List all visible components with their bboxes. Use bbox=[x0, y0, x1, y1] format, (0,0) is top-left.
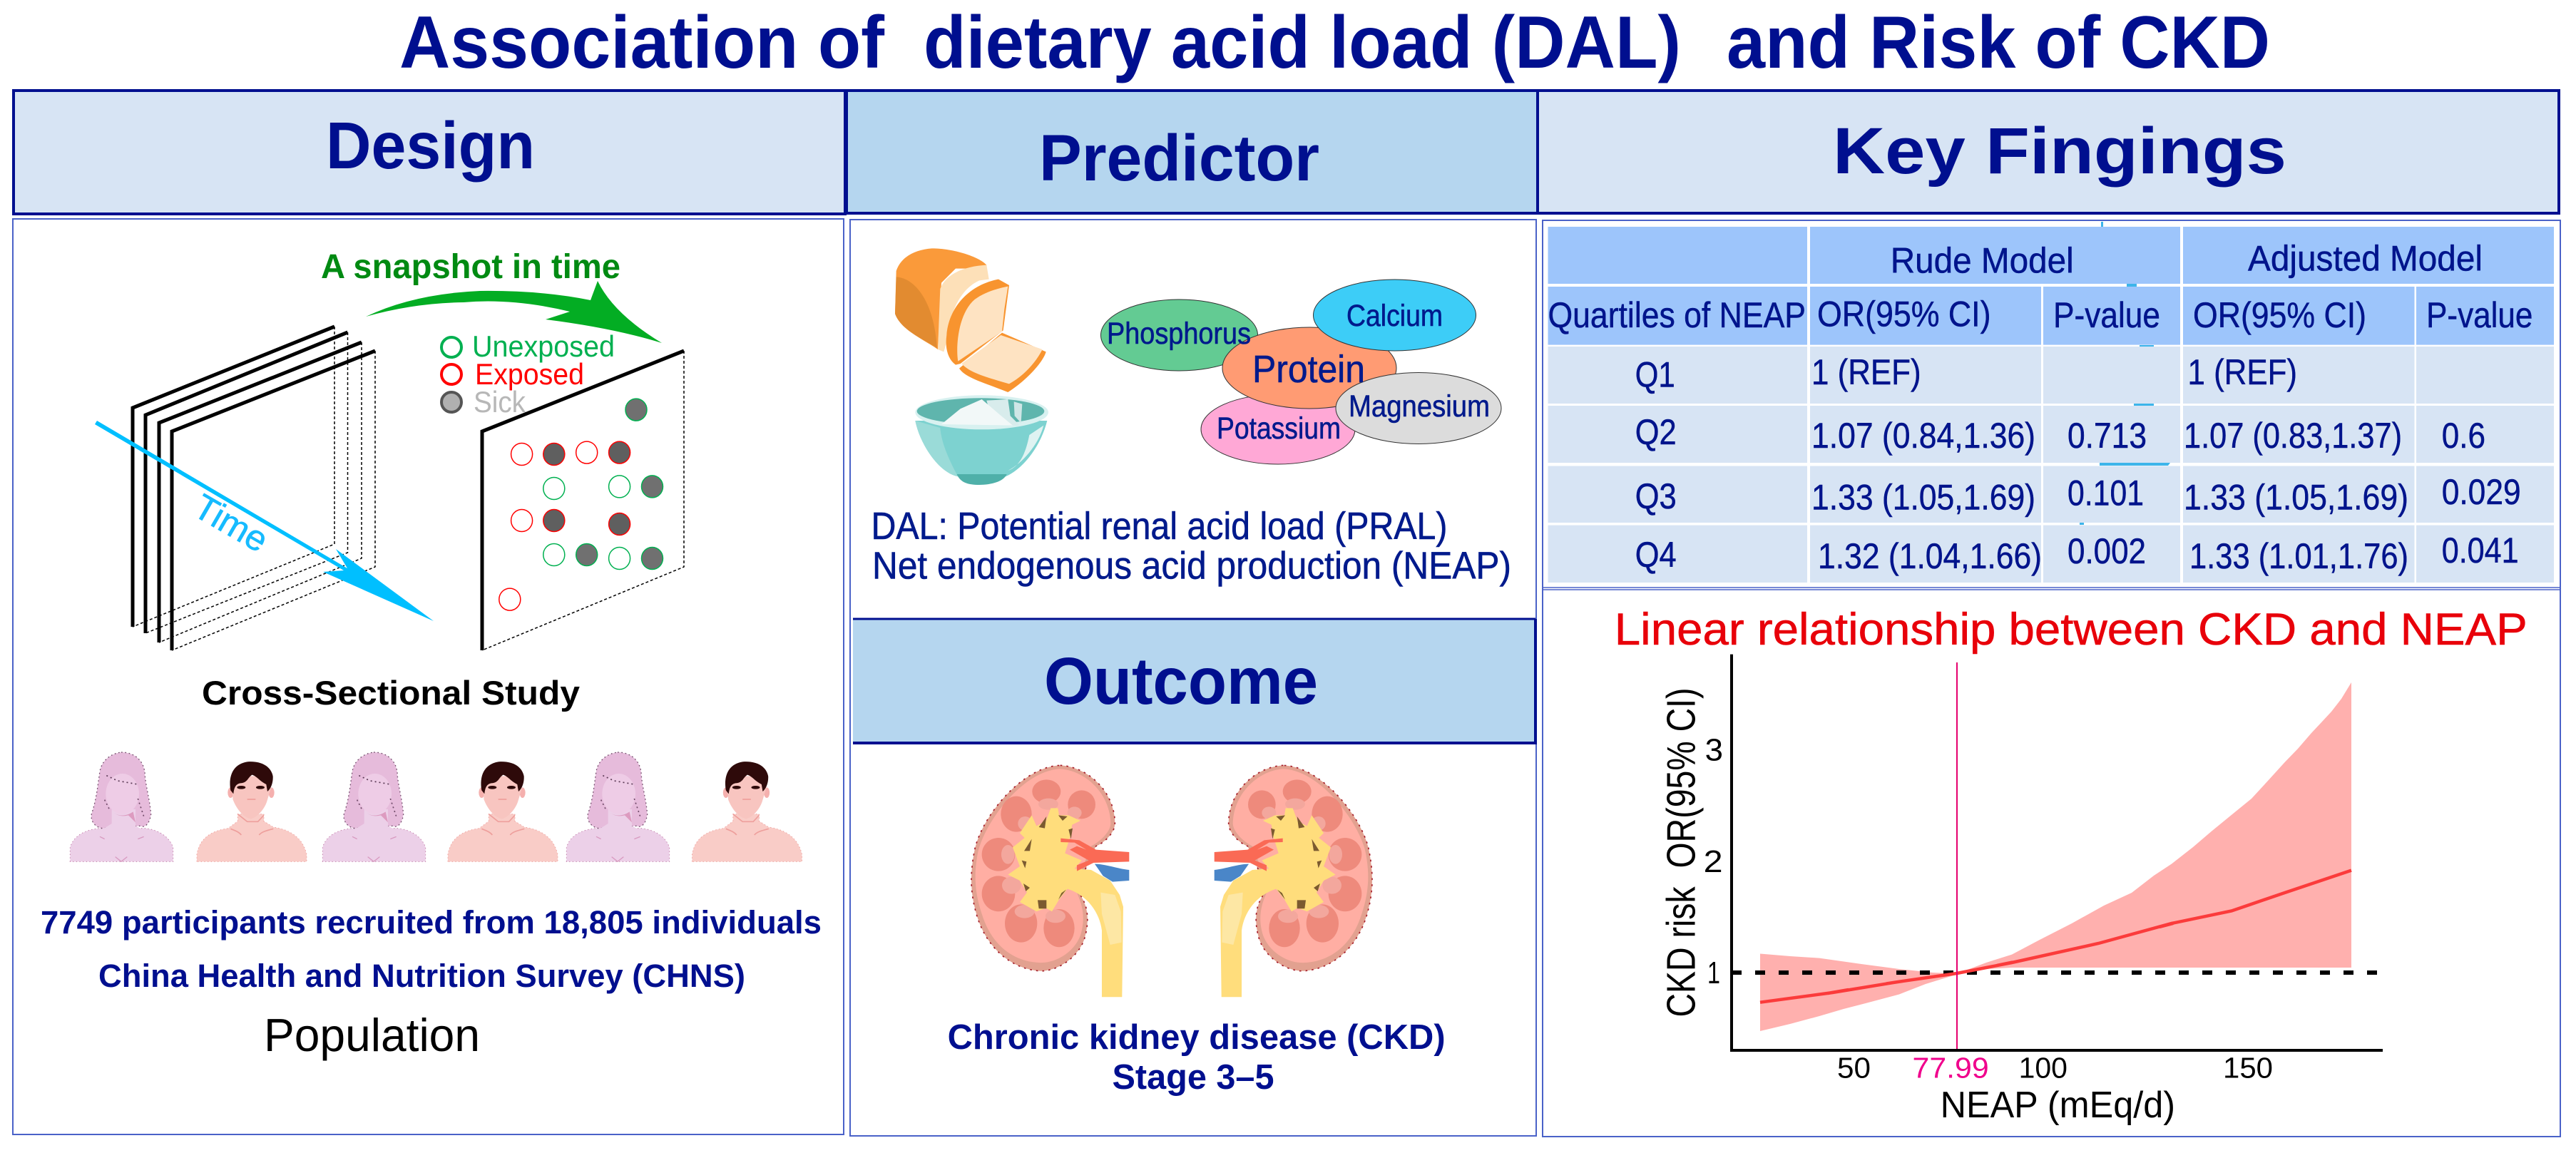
table row Q3: 0.101 bbox=[2068, 473, 2144, 513]
nutrient labels: Calcium bbox=[1346, 299, 1443, 333]
legend: Unexposed bbox=[472, 329, 615, 363]
title bbox=[399, 1, 2270, 84]
time label: Time bbox=[187, 486, 275, 560]
table row Q2 bbox=[1635, 412, 2485, 456]
participants count: 7749 participants recruited from 18,805 individuals bbox=[41, 904, 822, 941]
table header text: P-value bbox=[2426, 295, 2532, 335]
bubble: phosphorus bbox=[1101, 299, 1258, 371]
header: key findings: Key Fingings bbox=[1833, 115, 2286, 188]
table header text: P-value bbox=[2053, 295, 2160, 335]
DAL definition: DAL: Potential renal acid load (PRAL) bbox=[872, 505, 1448, 548]
table row Q1 bbox=[1635, 352, 2297, 394]
bubble: potassium bbox=[1201, 394, 1355, 464]
nutrient bubbles bbox=[1101, 280, 1501, 464]
DAL definition bbox=[872, 505, 1511, 588]
x axis ticks: 100 bbox=[2019, 1051, 2068, 1084]
icon: bread bbox=[895, 248, 1046, 392]
stray arrow fragments bbox=[2080, 222, 2170, 525]
DAL definition: Net endogenous acid production (NEAP) bbox=[872, 545, 1511, 588]
y axis ticks: 1 bbox=[1707, 955, 1720, 990]
stacked time frames bbox=[133, 327, 375, 650]
bubble: protein bbox=[1222, 327, 1396, 409]
bubble: calcium bbox=[1314, 280, 1476, 351]
table row Q2: 1.07 (0.83,1.37) bbox=[2184, 416, 2402, 456]
x axis ticks bbox=[1837, 1051, 2273, 1084]
y axis title: CKD risk OR(95% CI) bbox=[1660, 687, 1704, 1017]
table row Q3: 1.33 (1.05,1.69) bbox=[2184, 478, 2408, 518]
table row Q3: 0.029 bbox=[2442, 472, 2521, 512]
nutrient labels: Potassium bbox=[1217, 411, 1341, 446]
header: predictor: Predictor bbox=[1039, 122, 1319, 195]
table row Q2: 0.713 bbox=[2068, 416, 2147, 456]
confidence ribbon bbox=[1760, 682, 2351, 1031]
panel: key findings bbox=[1543, 220, 2560, 1137]
bubble: magnesium bbox=[1336, 372, 1501, 444]
header: outcome bbox=[853, 619, 1535, 743]
table row Q1: 1 (REF) bbox=[2188, 352, 2297, 392]
y axis ticks: 2 bbox=[1704, 844, 1723, 879]
x axis ticks: 50 bbox=[1837, 1051, 1871, 1084]
table row Q4 bbox=[1635, 531, 2519, 576]
snapshot label: A snapshot in time bbox=[321, 248, 620, 286]
reference line OR=1 bbox=[1732, 970, 2378, 975]
header: predictor bbox=[847, 91, 1538, 213]
nutrient labels: Phosphorus bbox=[1107, 317, 1251, 351]
snapshot frame with participants bbox=[482, 351, 684, 650]
panel: predictor and outcome bbox=[850, 220, 1536, 1136]
legend bbox=[441, 329, 615, 419]
header: key findings bbox=[1538, 91, 2559, 213]
table row Q2: 0.6 bbox=[2442, 416, 2485, 456]
nutrient labels: Protein bbox=[1252, 348, 1365, 391]
title: dietary acid load (DAL) bbox=[924, 1, 1681, 84]
nutrient labels: Magnesium bbox=[1349, 389, 1490, 424]
x axis ticks: 77.99 bbox=[1913, 1051, 1989, 1084]
outcome label bbox=[948, 1018, 1446, 1097]
y axis ticks bbox=[1704, 733, 1723, 990]
y axis ticks: 3 bbox=[1705, 733, 1723, 768]
nutrient labels bbox=[1107, 299, 1490, 446]
icon: kidneys bbox=[971, 765, 1372, 997]
title: and Risk of CKD bbox=[1727, 1, 2270, 84]
icons: participants bbox=[70, 752, 802, 861]
table row Q4: 0.002 bbox=[2068, 531, 2146, 571]
table row Q3 bbox=[1635, 472, 2521, 518]
header: design: Design bbox=[326, 108, 535, 183]
table header text: OR(95% CI) bbox=[1817, 294, 1991, 334]
chart title: Linear relationship between CKD and NEAP bbox=[1615, 605, 2528, 655]
table row Q3: 1.33 (1.05,1.69) bbox=[1811, 478, 2035, 518]
results table bbox=[1548, 222, 2554, 583]
survey name: China Health and Nutrition Survey (CHNS) bbox=[98, 958, 745, 994]
icon: bowl of flour bbox=[915, 395, 1048, 485]
odds ratio curve bbox=[1760, 871, 2351, 1003]
table header text bbox=[1548, 238, 2532, 335]
table header cells bbox=[1548, 227, 2554, 345]
table body cells bbox=[1548, 347, 2554, 583]
panel: design bbox=[13, 219, 844, 1134]
table row Q4: Q4 bbox=[1635, 535, 1677, 575]
legend: Exposed bbox=[475, 357, 584, 391]
table header text: OR(95% CI) bbox=[2193, 295, 2366, 335]
table row Q1: Q1 bbox=[1635, 354, 1675, 394]
table row Q4: 1.32 (1.04,1.66) bbox=[1818, 536, 2042, 576]
table header text: Quartiles of NEAP bbox=[1548, 295, 1806, 335]
population label: Population bbox=[264, 1009, 480, 1061]
study type label: Cross-Sectional Study bbox=[202, 674, 580, 712]
inflection marker line bbox=[1956, 662, 1958, 1050]
header: outcome: Outcome bbox=[1044, 644, 1318, 718]
table header text: Adjusted Model bbox=[2248, 238, 2483, 278]
arrow: time bbox=[95, 421, 434, 621]
table row Q2: 1.07 (0.84,1.36) bbox=[1811, 416, 2035, 456]
arrow: snapshot bbox=[366, 281, 662, 343]
chart: CKD risk vs NEAP bbox=[1615, 605, 2528, 1126]
x axis ticks: 150 bbox=[2223, 1051, 2273, 1084]
table row Q1: 1 (REF) bbox=[1811, 352, 1921, 392]
outcome label: Chronic kidney disease (CKD) bbox=[948, 1018, 1446, 1057]
x axis title: NEAP (mEq/d) bbox=[1941, 1085, 2175, 1126]
legend: Sick bbox=[474, 385, 526, 419]
table row Q4: 1.33 (1.01,1.76) bbox=[2189, 536, 2408, 576]
table row Q4: 0.041 bbox=[2442, 531, 2519, 570]
axes bbox=[1732, 655, 2383, 1050]
header: design bbox=[14, 91, 845, 214]
table row Q2: Q2 bbox=[1635, 412, 1677, 452]
title: Association of bbox=[399, 1, 884, 84]
table header text: Rude Model bbox=[1891, 241, 2074, 281]
table row Q3: Q3 bbox=[1635, 476, 1677, 516]
outcome label: Stage 3–5 bbox=[1113, 1058, 1274, 1097]
